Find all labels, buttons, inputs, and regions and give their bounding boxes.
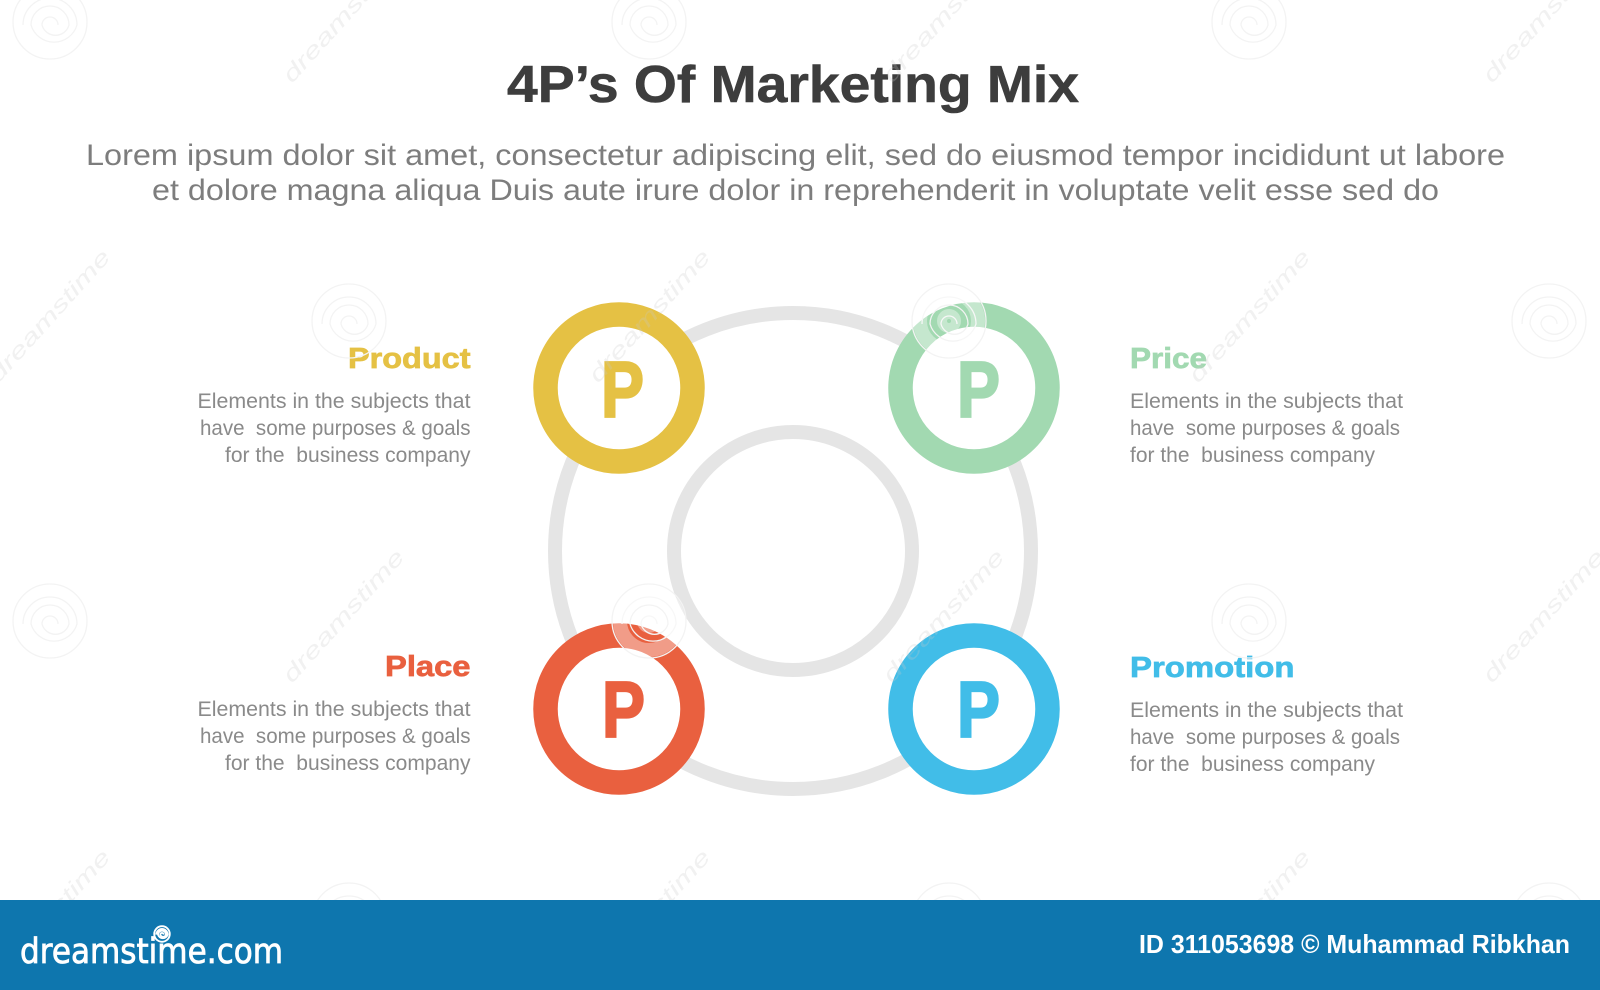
logo wordmark: dreamstime.com xyxy=(20,932,283,972)
watermark pattern: dreamstime xyxy=(583,244,715,387)
text block: Place: for the business company xyxy=(225,751,471,775)
text block: Price: have some purposes & goals xyxy=(1130,416,1400,440)
text block: Product: for the business company xyxy=(225,443,471,467)
node: Price: P xyxy=(957,344,1000,434)
text block: Place: Elements in the subjects that xyxy=(198,697,471,721)
watermark pattern: dreamstime xyxy=(877,544,1009,687)
node: Product: P xyxy=(601,344,644,434)
watermark pattern: dreamstime xyxy=(1183,844,1315,987)
watermark pattern: dreamstime xyxy=(1183,244,1315,387)
footer band xyxy=(0,900,1600,990)
node: Price xyxy=(900,314,1048,462)
text block: Price: Price xyxy=(1130,343,1207,375)
subtitle text block: et dolore magna aliqua Duis aute irure dolor in reprehenderit in voluptate velit esse sed do xyxy=(152,174,1439,207)
node: Promotion: P xyxy=(957,664,1000,754)
watermark pattern: dreamstime xyxy=(277,544,409,687)
title: 4P’s Of Marketing Mix xyxy=(507,56,1079,114)
text block: Product: Elements in the subjects that xyxy=(198,389,471,413)
text block: Price: for the business company xyxy=(1130,443,1375,467)
node: Place xyxy=(546,636,692,782)
central double ring xyxy=(555,313,1031,789)
icon: logo spiral xyxy=(154,926,170,942)
text block: Product: have some purposes & goals xyxy=(200,416,470,440)
text block: Price xyxy=(1130,343,1403,467)
text block: Price: Elements in the subjects that xyxy=(1130,389,1403,413)
text block: Promotion: have some purposes & goals xyxy=(1130,725,1400,749)
text block: Promotion xyxy=(1130,652,1403,776)
text block: Promotion: Promotion xyxy=(1130,652,1294,684)
text block: Product: Product xyxy=(348,343,471,375)
text block: Place: have some purposes & goals xyxy=(200,724,470,748)
watermark pattern: dreamstime xyxy=(583,844,715,987)
text block: Product xyxy=(198,343,471,467)
text block: Promotion: Elements in the subjects that xyxy=(1130,698,1403,722)
text block: Place xyxy=(198,651,471,775)
node: Place: P xyxy=(602,664,645,754)
node: Promotion xyxy=(900,636,1048,782)
node: Product xyxy=(546,314,692,462)
subtitle text block: Lorem ipsum dolor sit amet, consectetur adipiscing elit, sed do eiusmod tempor incididunt ut labore xyxy=(86,139,1505,172)
subtitle text block xyxy=(86,139,1505,207)
image credit: ID 311053698 © Muhammad Ribkhan xyxy=(1139,929,1570,959)
text block: Place: Place xyxy=(385,651,470,683)
watermark pattern: dreamstime xyxy=(1477,544,1600,687)
text block: Promotion: for the business company xyxy=(1130,752,1375,776)
